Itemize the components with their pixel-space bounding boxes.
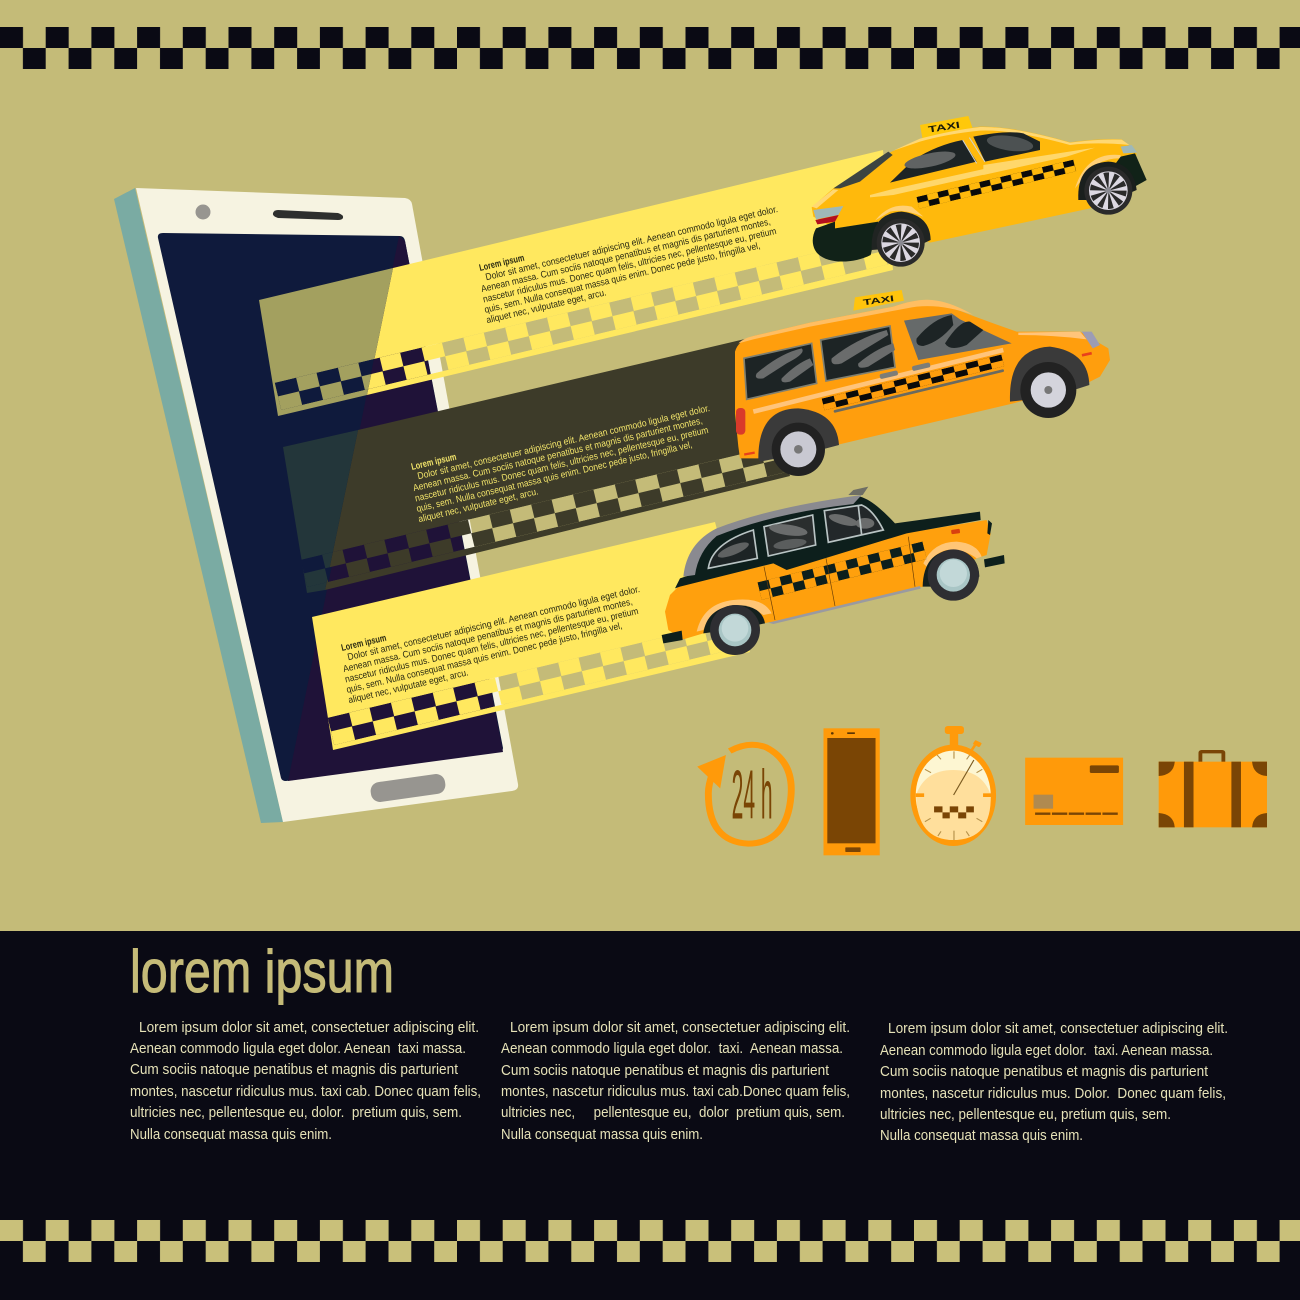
footer column 1 text: Cum sociis natoque penatibus et magnis dis parturient	[130, 1061, 459, 1078]
icon: suitcase	[1159, 752, 1267, 827]
band 3: yellow strip	[312, 522, 750, 750]
footer column 2 text: ultricies nec, pellentesque eu, dolor pretium quis, sem.	[501, 1104, 845, 1121]
band 3 text: Lorem ipsum	[340, 633, 387, 654]
band 3 text: nascetur ridiculus mus. Donec quam felis, ultricies nec, pellentesque eu, pretium	[344, 606, 640, 685]
car 3: black and orange classic cab	[662, 487, 1005, 655]
footer column 1 text: montes, nascetur ridiculus mus. taxi cab. Donec quam felis,	[130, 1083, 481, 1100]
band 1 text: quis, sem. Nulla consequat massa quis enim. Donec pede justo, fringilla vel,	[483, 241, 761, 316]
bottom checker strip	[0, 1220, 1300, 1262]
footer column 3 text	[880, 1020, 1228, 1144]
band 2 text: aliquet nec, vulputate eget, arcu.	[417, 486, 540, 525]
icons row: 24 h	[732, 755, 773, 833]
band 3 text	[335, 574, 651, 706]
band 1 text: Aenean massa. Cum sociis natoque penatibus et magnis dis parturient montes,	[480, 217, 772, 295]
car 1: yellow sedan taxi	[812, 116, 1147, 267]
car 2: orange van taxi	[735, 290, 1110, 476]
car 1: yellow sedan taxi: TAXI	[927, 120, 961, 135]
footer column 2 text: Nulla consequat massa quis enim.	[501, 1126, 703, 1143]
footer column 1 text: Lorem ipsum dolor sit amet, consectetuer adipiscing elit.	[139, 1019, 479, 1036]
footer column 3 text: montes, nascetur ridiculus mus. Dolor. Donec quam felis,	[880, 1085, 1226, 1102]
footer column 2 text: Aenean commodo ligula eget dolor. taxi. Aenean massa.	[501, 1040, 843, 1057]
icon: bank card	[1025, 758, 1123, 825]
band 3 text: Aenean massa. Cum sociis natoque penatibus et magnis dis parturient montes,	[342, 597, 634, 675]
footer column 2 text: Lorem ipsum dolor sit amet, consectetuer adipiscing elit.	[510, 1019, 850, 1036]
band 1 text: Dolor sit amet, consectetuer adipiscing elit. Aenean commodo ligula eget dolor.	[484, 204, 779, 283]
footer column 3 text: Cum sociis natoque penatibus et magnis dis parturient	[880, 1063, 1209, 1080]
icons row	[697, 726, 1267, 855]
footer column 1 text: Aenean commodo ligula eget dolor. Aenean taxi massa.	[130, 1040, 466, 1057]
band 1 text: aliquet nec, vulputate eget, arcu.	[485, 287, 608, 326]
footer column 3 text: Lorem ipsum dolor sit amet, consectetuer adipiscing elit.	[888, 1020, 1228, 1037]
band 2 text: nascetur ridiculus mus. Donec quam felis, ultricies nec, pellentesque eu, pretium	[414, 425, 710, 504]
icon: stopwatch	[910, 726, 996, 846]
footer column 2 text: montes, nascetur ridiculus mus. taxi cab.Donec quam felis,	[501, 1083, 850, 1100]
band 2 text: Dolor sit amet, consectetuer adipiscing elit. Aenean commodo ligula eget dolor.	[416, 403, 711, 482]
footer panel	[0, 931, 1300, 1300]
footer column 1 text	[130, 1019, 481, 1143]
smartphone	[114, 188, 518, 823]
band 2 text: Aenean massa. Cum sociis natoque penatibus et magnis dis parturient montes,	[412, 416, 704, 494]
band 1 text: Lorem ipsum	[478, 253, 525, 274]
footer column 1 text: ultricies nec, pellentesque eu, dolor. pretium quis, sem.	[130, 1104, 462, 1121]
band 2: dark strip	[283, 339, 790, 593]
icon: 24 hours	[697, 745, 791, 844]
icon: smartphone	[823, 728, 880, 855]
band 2 text: Lorem ipsum	[410, 452, 457, 473]
footer column 3 text: ultricies nec, pellentesque eu, pretium quis, sem.	[880, 1106, 1171, 1123]
background	[0, 0, 1300, 931]
footer column 2 text: Cum sociis natoque penatibus et magnis dis parturient	[501, 1062, 830, 1079]
band 1: yellow strip with text	[259, 150, 893, 416]
car 2: orange van taxi: TAXI	[862, 293, 895, 307]
footer column 1 text: Nulla consequat massa quis enim.	[130, 1126, 332, 1143]
footer heading: lorem ipsum	[130, 938, 394, 1005]
band 3 text: aliquet nec, vulputate eget, arcu.	[347, 667, 470, 706]
band 2 text	[405, 393, 721, 525]
footer column 3 text: Nulla consequat massa quis enim.	[880, 1127, 1083, 1144]
top checker strip	[0, 27, 1300, 69]
band 2 text: quis, sem. Nulla consequat massa quis enim. Donec pede justo, fringilla vel,	[415, 440, 693, 515]
band 3 text: Dolor sit amet, consectetuer adipiscing elit. Aenean commodo ligula eget dolor.	[346, 584, 641, 663]
band 1 text: nascetur ridiculus mus. Donec quam felis, ultricies nec, pellentesque eu, pretium	[482, 226, 778, 305]
footer column 2 text	[501, 1019, 850, 1143]
footer column 3 text: Aenean commodo ligula eget dolor. taxi. Aenean massa.	[880, 1042, 1213, 1059]
band 3 text: quis, sem. Nulla consequat massa quis enim. Donec pede justo, fringilla vel,	[345, 621, 623, 696]
band 1 text	[473, 194, 789, 326]
